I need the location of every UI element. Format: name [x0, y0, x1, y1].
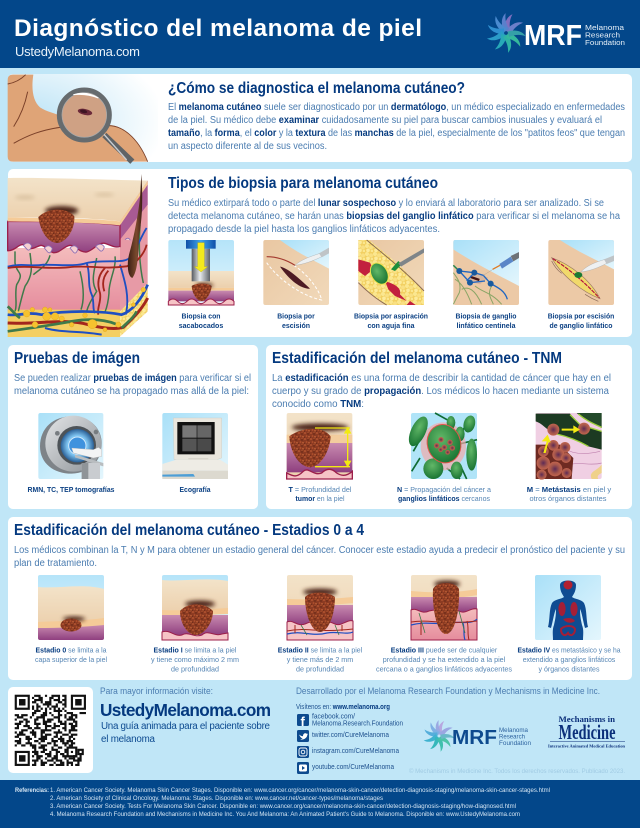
- panel: biopsy types: [8, 169, 632, 337]
- label: otros órganos distantes: [530, 494, 607, 503]
- illustration: shoulder and magnifier: [8, 74, 158, 162]
- footer: more information: [100, 686, 271, 745]
- icon: stage II: [287, 575, 353, 640]
- label: Estadio II se limita a la piel: [278, 646, 363, 654]
- label: de profundidad: [171, 664, 219, 674]
- panel: stages 0 to 4: [8, 517, 632, 680]
- label: extendido a ganglios linfáticos: [523, 655, 616, 664]
- references band: 1. American Cancer Society. Melanoma Skin Cancer Stages. Disponible en: www.cancer.org/cancer/melanoma-skin-cancer/detection-diagnosis-staging/melanoma-skin-cancer-stages.html: [50, 787, 550, 794]
- icon: facebook: f: [300, 714, 306, 729]
- panel: how melanoma is diagnosed: [8, 74, 632, 162]
- label: tumor en la piel: [296, 494, 345, 503]
- icon: excision biopsy: [263, 240, 329, 305]
- heading: Estadificación del melanoma cutáneo - TNM: [272, 350, 562, 367]
- MRF logo header: Foundation: [585, 40, 625, 47]
- body text: [168, 102, 625, 152]
- references band: 4. Melanoma Research Foundation and Mechanisms in Medicine Inc. You And Melanoma: An Animated Patient's Guide to Melanoma. Disponible en: www.UstedyMelanoma.com: [50, 811, 520, 818]
- vessels: [8, 225, 148, 335]
- icon: instagram: [297, 746, 309, 758]
- MRF logo footer: [424, 720, 531, 752]
- label: Ecografía: [180, 485, 211, 494]
- label: [518, 646, 620, 674]
- references band: Referencias:: [15, 787, 49, 794]
- label: Biopsia de ganglio: [456, 312, 517, 320]
- label: M = Metástasis en piel y: [527, 485, 612, 494]
- label: [35, 646, 107, 664]
- body text: un aspecto diferente al de sus vecinos.: [168, 141, 327, 152]
- references band: 2. American Society of Clinical Oncology. Melanoma: Stages. Disponible en: www.cancer.net/cancer-types/melanoma/stages: [50, 795, 383, 802]
- icon: stage 0: [38, 575, 104, 640]
- website large: UstedyMelanoma.com: [100, 700, 271, 720]
- header band: [0, 0, 640, 68]
- icon: T tumor depth: [287, 413, 352, 479]
- label: ganglios linfáticos cercanos: [398, 494, 490, 503]
- footer: developers and social links: [296, 686, 600, 774]
- label: sacabocados: [179, 321, 223, 330]
- body text: melanoma cutáneo se ha propagado mas allá de la piel:: [14, 386, 249, 397]
- label: [278, 646, 363, 674]
- copyright: © Mechanisms in Medicine Inc. Todos los derechos reservados. Publicado 2023.: [409, 767, 625, 775]
- body text: cuerpo y su grado de propagación. Los médicos lo hacen mediante un sistema: [272, 386, 609, 397]
- body text: [14, 373, 251, 397]
- label: con aguja fina: [368, 321, 415, 330]
- label: Biopsia con: [182, 312, 220, 320]
- tumor: [45, 206, 78, 215]
- label: Estadio IV es metastásico y se ha: [518, 646, 620, 654]
- body text: de la piel. Su médico debe examinar cuidadosamente su piel para buscar cambios inusuales y evaluará el: [168, 115, 602, 126]
- label: de ganglio linfático: [550, 321, 613, 330]
- MRF logo header: Melanoma: [585, 25, 624, 32]
- MRF logo footer: Melanoma: [499, 727, 528, 734]
- label: profundidad y se ha extendido a la piel: [383, 655, 506, 664]
- body text: conocido como TNM:: [272, 399, 364, 410]
- icon: youtube: [297, 762, 309, 774]
- MRF logo footer: Foundation: [499, 740, 531, 747]
- icon: excisional node biopsy: [548, 240, 614, 305]
- facebook link: Melanoma.Research.Foundation: [312, 718, 403, 728]
- instagram link: instagram.com/CureMelanoma: [312, 746, 400, 755]
- facebook link: facebook.com/: [312, 712, 356, 721]
- body text: Su médico extirpará todo o parte del lunar sospechoso y lo enviará al laboratorio para ser analizado. Si se: [168, 198, 604, 209]
- website subtitle: UstedyMelanoma.com: [15, 44, 140, 59]
- guide description: Una guía animada para el paciente sobre: [101, 721, 271, 732]
- label: RMN, TC, TEP tomografías: [28, 485, 114, 494]
- label: [376, 646, 512, 674]
- label: N = Propagación del cáncer a: [397, 485, 491, 494]
- body text: detecta melanoma cutáneo, se harán unas biopsias del ganglio linfático para verificar si el melanoma se ha: [168, 211, 620, 222]
- heading: Pruebas de imágen: [14, 350, 140, 367]
- youtube link: youtube.com/CureMelanoma: [312, 762, 395, 771]
- label: cercana o a ganglios linfáticos adyacentes: [376, 664, 512, 674]
- body text: tamaño, la forma, el color y la textura de las manchas de la piel, especialmente de los "patitos feos" que tengan: [168, 128, 625, 139]
- body text: plan de tratamiento.: [14, 558, 97, 569]
- body text: La estadificación es una forma de describir la cantidad de cáncer que hay en el: [272, 373, 611, 384]
- label: escisión: [282, 321, 310, 330]
- body text: El melanoma cutáneo suele ser diagnosticado por un dermatólogo, un médico especializado en enfermedades: [168, 102, 625, 113]
- Mechanisms in Medicine logo: Mechanisms in: [558, 715, 616, 724]
- label: y tiene como máximo 2 mm: [151, 655, 239, 664]
- MRF logo footer: MRF: [452, 727, 497, 749]
- label: capa superior de la piel: [35, 655, 107, 664]
- label: Estadio I se limita a la piel: [154, 646, 237, 654]
- icon: fine needle aspiration: [358, 240, 424, 305]
- icon: sentinel node biopsy: [453, 240, 519, 305]
- heading: ¿Cómo se diagnostica el melanoma cutáneo?: [168, 80, 465, 97]
- guide description: el melanoma: [101, 734, 156, 745]
- Mechanisms in Medicine logo: Interactive Animated Medical Education: [548, 744, 626, 748]
- guide description: [101, 721, 271, 745]
- label: Biopsia por aspiración: [354, 312, 428, 320]
- body text: propagado desde la piel hasta los ganglios linfáticos adyacentes.: [168, 224, 440, 235]
- body text: [14, 545, 625, 569]
- body text: Se pueden realizar pruebas de imágen para verificar si el: [14, 373, 251, 384]
- footer: more information: Para mayor información visite:: [100, 686, 213, 697]
- label: [527, 485, 612, 503]
- heading: Tipos de biopsia para melanoma cutáneo: [168, 175, 438, 192]
- illustration: skin cross-section: [8, 174, 148, 337]
- label: de profundidad: [296, 664, 344, 674]
- Mechanisms in Medicine logo: [548, 715, 626, 748]
- icon: stage IV body: [535, 575, 601, 640]
- panel: TNM staging: [266, 345, 632, 509]
- MRF logo header: MRF: [524, 20, 582, 52]
- icon: ultrasound monitor: [162, 413, 228, 479]
- facebook link: [312, 712, 403, 728]
- MRF logo header: Research: [585, 32, 620, 40]
- label: Biopsia por escisión: [548, 312, 614, 320]
- MRF logo header: [487, 13, 625, 53]
- label: linfático centinela: [456, 321, 516, 330]
- Mechanisms in Medicine logo: Medicine: [558, 720, 616, 744]
- icon: N lymph nodes: [405, 413, 477, 479]
- icon: punch biopsy: [168, 240, 234, 305]
- label: [288, 485, 352, 503]
- label: Estadio III puede ser de cualquier: [391, 646, 498, 654]
- label: y tiene más de 2 mm: [287, 655, 353, 664]
- icon: facebook: [297, 714, 309, 729]
- twitter link: twitter.com/CureMelanoma: [312, 730, 390, 739]
- label: [397, 485, 491, 503]
- body text: [168, 198, 620, 235]
- references band: 3. American Cancer Society. Tests For Melanoma Skin Cancer. Disponible en: www.cancer.org/cancer/melanoma-skin-cancer/detection-diagnosis-staging/how-diagnosed.html: [50, 803, 516, 810]
- label: T = Profundidad del: [288, 485, 352, 494]
- panel: imaging tests: [8, 345, 258, 509]
- label: [151, 646, 239, 674]
- references band: [0, 780, 640, 828]
- label: Biopsia por: [277, 312, 315, 320]
- label: Estadio 0 se limita a la: [36, 646, 106, 654]
- hair follicle: [128, 174, 142, 278]
- body text: [272, 373, 611, 410]
- icon: stage I: [162, 575, 228, 640]
- icon: stage III: [411, 575, 477, 640]
- icon: twitter: [297, 730, 309, 742]
- title: Diagnóstico del melanoma de piel: [14, 15, 422, 42]
- visit line: Visítenos en: www.melanoma.org: [296, 702, 390, 711]
- icon: M metastasis: [536, 413, 602, 480]
- QR code panel: [8, 687, 93, 773]
- MRF logo footer: Research: [499, 734, 525, 740]
- heading: Estadificación del melanoma cutáneo - Estadios 0 a 4: [14, 522, 364, 539]
- label: y órganos distantes: [538, 664, 600, 674]
- icon: MRI scanner: [38, 413, 103, 479]
